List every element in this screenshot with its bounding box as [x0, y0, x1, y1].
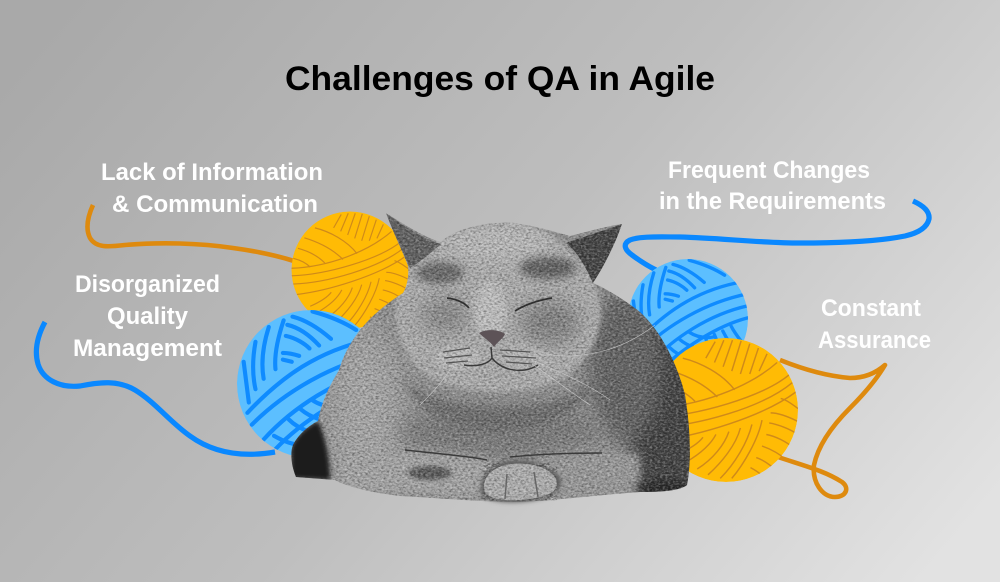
label: lack of information: Lack of Information — [101, 159, 323, 186]
title: Challenges of QA in Agile — [285, 60, 715, 98]
label: constant assurance — [818, 295, 931, 354]
label: lack of information — [101, 159, 323, 218]
label: disorganized quality management: Disorganized — [75, 271, 220, 298]
label: lack of information: & Communication — [112, 191, 318, 218]
yarn ball: yellow right — [654, 338, 798, 482]
label: frequent changes — [659, 157, 886, 215]
label: disorganized quality management — [73, 271, 222, 362]
head — [386, 213, 622, 392]
yarn ball: blue left — [237, 310, 385, 458]
label: constant assurance: Assurance — [818, 327, 931, 354]
body shading — [327, 290, 708, 540]
label: frequent changes: in the Requirements — [659, 188, 886, 215]
cat photo — [291, 213, 690, 505]
yarn ball: yellow left — [292, 212, 408, 328]
yarn ball: blue right — [628, 259, 748, 379]
paw — [481, 461, 561, 502]
mouth and creases — [405, 347, 602, 460]
eyes — [447, 298, 552, 311]
string: orange right — [778, 360, 885, 497]
whisker pads — [443, 348, 536, 364]
nose — [479, 330, 505, 347]
whiskers — [420, 325, 655, 405]
label: disorganized quality management: Management — [73, 335, 222, 362]
string: orange left — [87, 205, 294, 261]
label: disorganized quality management: Quality — [107, 303, 189, 330]
string: blue right — [625, 201, 929, 270]
string: blue left — [36, 322, 275, 454]
tail — [291, 421, 330, 480]
label: frequent changes: Frequent Changes — [668, 157, 870, 184]
label: constant assurance: Constant — [821, 295, 921, 322]
